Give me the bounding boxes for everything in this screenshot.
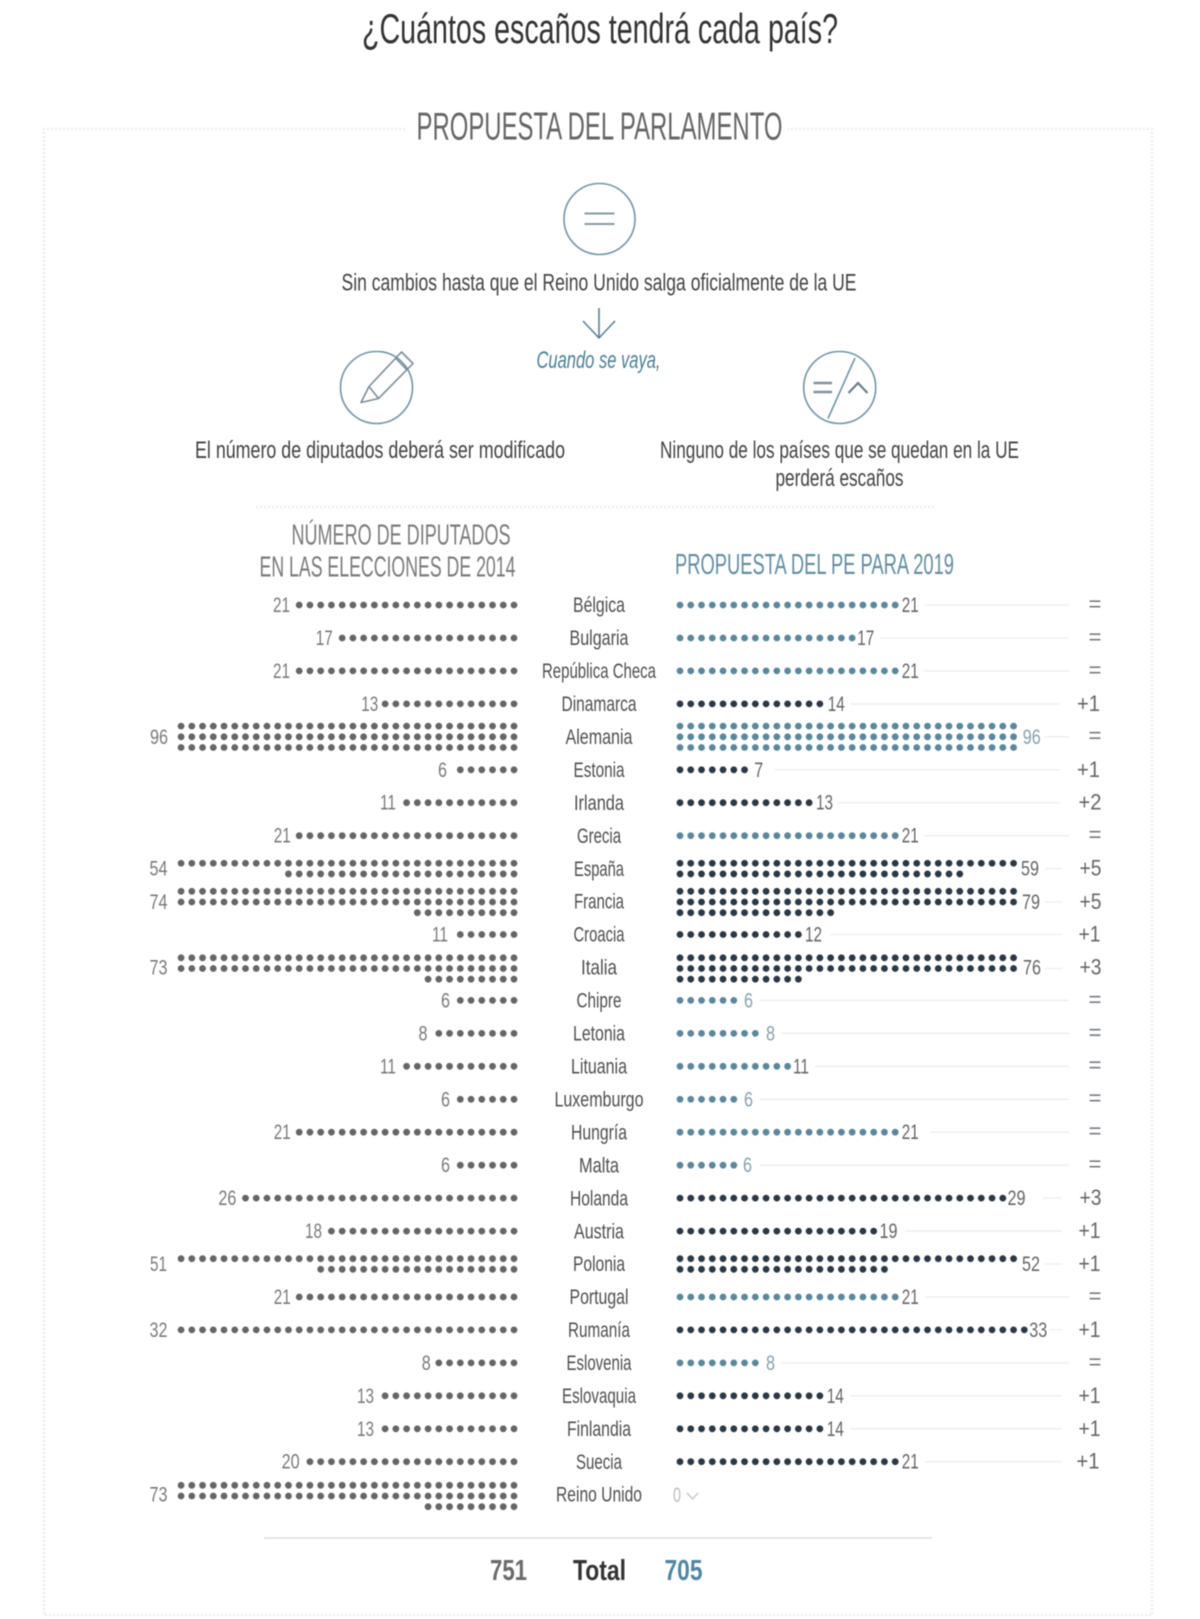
row: Finlandia: 14: [827, 1417, 844, 1441]
column heading: 2019: PROPUESTA DEL PE PARA 2019: [675, 549, 954, 581]
row: Polonia: +1: [1078, 1251, 1100, 1276]
row: Irlanda: Irlanda: [574, 791, 624, 815]
total: 2019: 705: [664, 1555, 702, 1587]
row: Eslovaquia: 13: [357, 1384, 374, 1408]
row: Austria: Austria: [574, 1219, 624, 1243]
row: Letonia: 8: [418, 1021, 428, 1045]
row: Alemania: Alemania: [566, 725, 633, 749]
row: Eslovaquia: Eslovaquia: [562, 1384, 636, 1408]
row: Luxemburgo: [441, 1086, 1102, 1112]
row: Holanda: Holanda: [570, 1186, 628, 1210]
row: Bélgica: 21: [902, 593, 919, 617]
row: Chipre: [441, 987, 1102, 1013]
row: Letonia: [418, 1020, 1102, 1046]
row: Holanda: [218, 1185, 1101, 1210]
row: Dinamarca: 13: [361, 692, 378, 716]
text: ningun pais pierde escaños: perderá escaños: [776, 465, 904, 492]
row: España: 54: [150, 857, 168, 881]
row: Luxemburgo: 6: [744, 1087, 753, 1111]
row: Bélgica: Bélgica: [573, 593, 625, 617]
row: Portugal: Portugal: [570, 1285, 628, 1309]
row: Finlandia: Finlandia: [567, 1417, 631, 1441]
row: Eslovenia: [422, 1349, 1102, 1375]
row: Lituania: [380, 1053, 1102, 1078]
row: Polonia: 52: [1022, 1252, 1040, 1276]
row: Grecia: [274, 822, 1102, 848]
row: Eslovenia: =: [1088, 1349, 1102, 1374]
row: Holanda: 29: [1008, 1186, 1026, 1210]
row: Croacia: 12: [805, 922, 822, 946]
row: Estonia: 6: [438, 758, 447, 782]
row: Finlandia: +1: [1078, 1416, 1100, 1441]
total label: Total: [573, 1555, 626, 1587]
row: República Checa: 21: [902, 659, 919, 683]
row: Estonia: Estonia: [574, 758, 625, 782]
row: Holanda: 26: [218, 1186, 236, 1210]
row: Reino Unido: 0: [673, 1484, 681, 1507]
column heading: 2014: [260, 520, 516, 584]
row: Malta: [441, 1152, 1102, 1177]
row: Croacia: 11: [432, 922, 448, 946]
row: Bulgaria: [316, 624, 1102, 650]
row: Hungría: 21: [902, 1120, 919, 1144]
row: Eslovenia: 8: [422, 1351, 431, 1375]
row: Suecia: 20: [282, 1450, 300, 1474]
row: Eslovaquia: [357, 1383, 1100, 1408]
row: Austria: +1: [1078, 1218, 1100, 1243]
row: Suecia: Suecia: [576, 1450, 622, 1474]
row: Finlandia: 13: [357, 1417, 374, 1441]
row: Bulgaria: 17: [857, 626, 874, 650]
row: Grecia: Grecia: [577, 824, 621, 848]
row: Letonia: 8: [766, 1021, 775, 1045]
row: Portugal: [274, 1283, 1102, 1309]
row: Chipre: =: [1088, 987, 1102, 1012]
row: Austria: 19: [880, 1219, 898, 1243]
row: Polonia: Polonia: [573, 1252, 625, 1276]
row: Italia: +3: [1080, 954, 1102, 980]
row: Bulgaria: =: [1088, 624, 1102, 649]
row: Lituania: 11: [380, 1054, 396, 1078]
row: Eslovenia: 8: [766, 1351, 775, 1375]
icon: equals in circle: [564, 184, 635, 254]
row: Francia: +5: [1080, 889, 1102, 914]
row: Malta: 6: [441, 1153, 450, 1177]
row: Rumanía: +1: [1078, 1317, 1100, 1342]
row: Irlanda: [380, 790, 1102, 815]
row: Luxemburgo: Luxemburgo: [554, 1088, 644, 1112]
row: Finlandia: [357, 1416, 1100, 1441]
chart: seats per country: [150, 591, 1102, 1507]
column heading: 2014: NÚMERO DE DIPUTADOS: [292, 520, 510, 552]
row: Bélgica: [273, 591, 1102, 617]
row: Austria: 18: [305, 1219, 322, 1243]
text: ningun pais pierde escaños: [660, 437, 1019, 492]
icon: equals slash caret in circle: [804, 352, 876, 424]
row: Rumanía: [150, 1317, 1100, 1342]
row: Alemania: [150, 723, 1102, 749]
row: Lituania: 11: [793, 1054, 809, 1078]
row: Dinamarca: 14: [828, 692, 845, 716]
row: Alemania: 96: [1023, 725, 1041, 749]
text: ningun pais pierde escaños: Ninguno de los países que se quedan en la UE: [660, 437, 1019, 464]
row: Francia: [150, 889, 1102, 914]
row: Bulgaria: Bulgaria: [570, 626, 629, 650]
row: Malta: Malta: [579, 1153, 619, 1177]
row: República Checa: 21: [273, 659, 290, 683]
row: Austria: [305, 1218, 1100, 1243]
row: Eslovaquia: 14: [827, 1384, 844, 1408]
text: sin cambios: Sin cambios hasta que el Reino Unido salga oficialmente de la UE: [342, 270, 856, 296]
row: Francia: 74: [150, 890, 168, 914]
row: Suecia: 21: [902, 1450, 919, 1474]
text: cuando se vaya: Cuando se vaya,: [536, 347, 660, 374]
row: República Checa: [273, 657, 1102, 683]
row: Irlanda: 13: [816, 791, 833, 815]
row: España: [150, 856, 1102, 881]
row: Italia: Italia: [581, 956, 617, 980]
title: ¿Cuántos escaños tendrá cada país?: [362, 5, 838, 52]
row: Malta: =: [1088, 1152, 1102, 1177]
row: Suecia: +1: [1076, 1449, 1100, 1474]
row: Italia: 73: [150, 956, 168, 980]
row: Lituania: Lituania: [571, 1055, 627, 1079]
row: Francia: 79: [1022, 890, 1040, 914]
row: Holanda: +3: [1080, 1185, 1102, 1210]
row: Portugal: 21: [274, 1285, 291, 1309]
row: Luxemburgo: =: [1088, 1086, 1102, 1111]
row: Suecia: [282, 1449, 1100, 1474]
row: España: 59: [1021, 857, 1039, 881]
row: Rumanía: Rumanía: [568, 1318, 630, 1342]
row: Hungría: 21: [274, 1120, 291, 1144]
row: Estonia: 7: [754, 758, 763, 782]
row: Rumanía: 33: [1029, 1318, 1047, 1342]
row: Eslovaquia: +1: [1078, 1383, 1100, 1408]
row: Dinamarca: Dinamarca: [562, 692, 637, 716]
row: Eslovenia: Eslovenia: [566, 1351, 632, 1375]
row: Croacia: Croacia: [574, 923, 625, 947]
row: Chipre: Chipre: [576, 989, 622, 1013]
row: Italia: [150, 954, 1102, 980]
row: Bélgica: 21: [273, 593, 290, 617]
row: Croacia: [432, 922, 1100, 947]
row: Alemania: 96: [150, 725, 168, 749]
column heading: 2014: EN LAS ELECCIONES DE 2014: [260, 552, 516, 584]
row: Grecia: =: [1088, 822, 1102, 847]
row: Grecia: 21: [902, 824, 919, 848]
row: Francia: Francia: [574, 890, 624, 914]
row: Luxemburgo: 6: [441, 1087, 450, 1111]
total: 2014: 751: [490, 1555, 527, 1587]
row: Portugal: 21: [902, 1285, 919, 1309]
arrow: down: [583, 308, 615, 338]
row: Letonia: =: [1088, 1020, 1102, 1045]
row: Bélgica: =: [1088, 591, 1102, 616]
row: Hungría: [274, 1119, 1102, 1144]
row: Reino Unido: [150, 1482, 698, 1507]
panel heading: propuesta del parlamento: PROPUESTA DEL PARLAMENTO: [416, 106, 782, 148]
row: Polonia: [150, 1251, 1100, 1276]
row: Chipre: 6: [744, 988, 753, 1012]
row: Alemania: =: [1088, 723, 1102, 748]
row: Bulgaria: 17: [316, 626, 333, 650]
row: Polonia: 51: [150, 1252, 167, 1276]
row: Reino Unido: Reino Unido: [556, 1483, 642, 1507]
text: numero de diputados modificado: El número de diputados deberá ser modificado: [195, 437, 565, 464]
row: Estonia: +1: [1077, 757, 1100, 782]
row: Italia: 76: [1023, 956, 1041, 980]
row: Croacia: +1: [1078, 922, 1100, 946]
row: Irlanda: +2: [1078, 790, 1102, 815]
row: Dinamarca: +1: [1077, 691, 1100, 716]
row: España: España: [574, 857, 624, 881]
row: Grecia: 21: [274, 824, 291, 848]
icon: pencil in circle: [340, 352, 413, 424]
row: Lituania: =: [1088, 1053, 1102, 1078]
row: Rumanía: 32: [150, 1318, 168, 1342]
row: Letonia: Letonia: [573, 1022, 625, 1046]
row: República Checa: =: [1088, 657, 1102, 682]
row: Portugal: =: [1088, 1283, 1102, 1308]
row: República Checa: República Checa: [542, 659, 656, 683]
row: Hungría: Hungría: [571, 1120, 627, 1144]
row: España: +5: [1080, 856, 1102, 881]
row: Hungría: =: [1088, 1119, 1102, 1144]
row: Reino Unido: 73: [150, 1482, 168, 1506]
row: Malta: 6: [743, 1153, 752, 1177]
row: Estonia: [438, 757, 1100, 782]
row: Irlanda: 11: [380, 791, 396, 815]
row: Chipre: 6: [441, 988, 450, 1012]
row: Dinamarca: [361, 691, 1100, 716]
